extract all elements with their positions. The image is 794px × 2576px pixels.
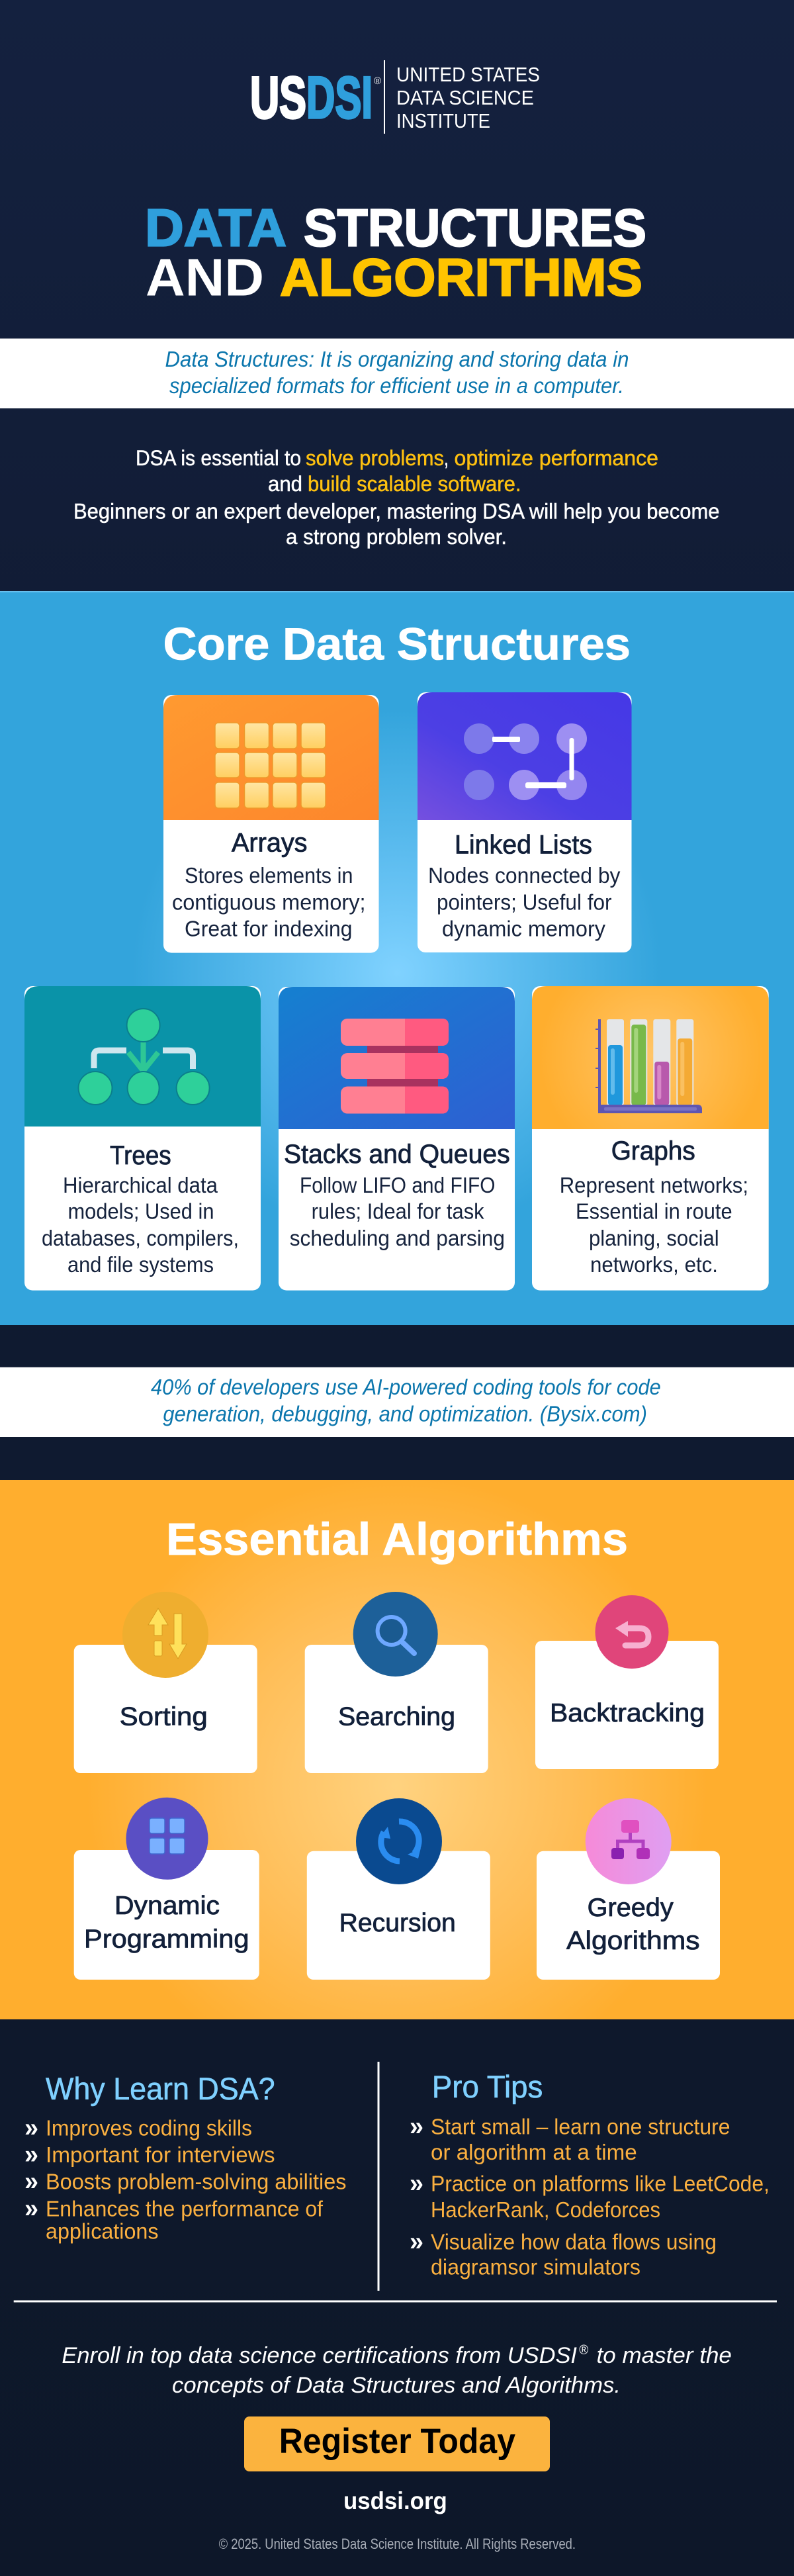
bullet list: why learn: Important for interviews	[46, 2142, 275, 2167]
trees description	[42, 1173, 239, 1277]
card: trees	[24, 986, 261, 1291]
intro text: a strong problem solver.	[286, 525, 507, 549]
stacks description	[290, 1173, 505, 1250]
bullet list: why learn: »	[24, 2140, 38, 2170]
title: DATA	[145, 199, 287, 257]
card: recursion	[307, 1798, 490, 1980]
bullet list: why learn: Enhances the performance of	[46, 2196, 324, 2221]
trees description: databases, compilers,	[42, 1226, 239, 1250]
bullet list: why learn: Boosts problem-solving abilities	[46, 2170, 347, 2193]
definition band	[0, 339, 794, 408]
graphs description: Essential in route	[576, 1199, 732, 1223]
label: greedy algorithms: Algorithms	[566, 1927, 700, 1955]
graphs title: Graphs	[611, 1136, 695, 1166]
arrays title: Arrays	[232, 829, 307, 858]
call to action text: to master the	[597, 2343, 732, 2368]
call to action text: Enroll in top data science certifications from USDSI	[62, 2343, 578, 2368]
linked lists description	[428, 863, 621, 941]
intro text: solve problems	[306, 446, 444, 470]
heading: essential algorithms: Essential Algorithms	[166, 1514, 628, 1565]
label: dynamic programming: Dynamic	[114, 1892, 220, 1920]
label: recursion: Recursion	[339, 1909, 456, 1937]
bullet list: why learn: »	[24, 2167, 38, 2196]
bullet list: pro tips: »	[410, 2227, 423, 2256]
bullet list: pro tips	[410, 2112, 770, 2279]
panel: why learn DSA	[24, 2071, 347, 2244]
intro text: optimize performance	[454, 446, 658, 470]
stacks title: Stacks and Queues	[284, 1140, 510, 1169]
panel: pro tips	[410, 2069, 770, 2279]
card: arrays	[163, 695, 378, 953]
trees title: Trees	[110, 1141, 171, 1170]
graphs description: Represent networks;	[560, 1173, 748, 1197]
icon: sort arrows	[122, 1592, 208, 1678]
heading: pro tips: Pro Tips	[432, 2069, 543, 2104]
call to action text: ®	[579, 2343, 588, 2358]
bullet list: pro tips: Visualize how data flows using	[431, 2229, 717, 2254]
graphs description	[560, 1173, 748, 1277]
card: sorting	[74, 1592, 257, 1773]
graphs description: planing, social	[589, 1226, 719, 1250]
bullet list: pro tips: or algorithm at a time	[431, 2140, 637, 2164]
card: greedy algorithms	[537, 1798, 720, 1980]
copyright: © 2025. United States Data Science Institute. All Rights Reserved.	[219, 2536, 576, 2552]
intro text: build scalable software.	[308, 472, 521, 496]
intro text: DSA is essential to	[136, 446, 301, 470]
bullet list: pro tips: Practice on platforms like LeetCode,	[431, 2171, 770, 2196]
heading: core data structures: Core Data Structures	[163, 618, 631, 670]
label: dynamic programming: Programming	[84, 1925, 249, 1954]
card: stacks and queues	[279, 987, 515, 1291]
graphs description: networks, etc.	[590, 1252, 718, 1277]
icon: bar chart	[596, 1019, 702, 1113]
statistic band	[0, 1367, 794, 1437]
stacks description: scheduling and parsing	[290, 1226, 505, 1250]
logo: ®	[374, 75, 381, 87]
bullet list: pro tips: Start small – learn one structure	[431, 2114, 730, 2139]
icon: stack layers	[341, 1019, 449, 1113]
logo: UNITED STATES	[396, 63, 540, 86]
bullet list: pro tips: »	[410, 2112, 423, 2141]
statistic band: generation, debugging, and optimization. (Bysix.com)	[163, 1401, 647, 1426]
bullet list: why learn: Improves coding skills	[46, 2115, 252, 2140]
bullet list: why learn: »	[24, 2113, 38, 2142]
website link: usdsi.org	[343, 2487, 447, 2514]
column divider	[377, 2062, 380, 2291]
icon: cycle arrows	[356, 1798, 442, 1884]
icon: grid	[215, 723, 326, 808]
stacks description: rules; Ideal for task	[312, 1199, 484, 1223]
definition band: specialized formats for efficient use in a computer.	[169, 373, 624, 398]
button: register today	[244, 2416, 550, 2471]
card: linked lists	[418, 692, 631, 952]
panel: essential algorithms	[0, 1480, 794, 2019]
logo: INSTITUTE	[396, 109, 490, 132]
card: dynamic programming	[74, 1798, 259, 1980]
icon: undo arrow	[596, 1595, 668, 1669]
icon: magnifier	[353, 1592, 438, 1677]
linked lists title: Linked Lists	[455, 830, 592, 859]
linked lists description: Nodes connected by	[428, 863, 621, 888]
intro text: ,	[444, 446, 449, 470]
statistic band: 40% of developers use AI-powered coding tools for code	[151, 1375, 661, 1399]
title: ALGORITHMS	[280, 248, 642, 307]
panel: core data structures	[0, 591, 794, 1325]
label: searching: Searching	[338, 1702, 455, 1731]
logo: US	[250, 64, 306, 130]
logo: DSI	[306, 64, 373, 130]
title: STRUCTURES	[304, 199, 646, 257]
trees description: Hierarchical data	[63, 1173, 218, 1197]
icon: linked nodes	[464, 723, 587, 800]
logo	[250, 60, 540, 134]
intro text: Beginners or an expert developer, mastering DSA will help you become	[73, 499, 720, 523]
label: sorting: Sorting	[120, 1702, 208, 1731]
bullet list: pro tips: HackerRank, Codeforces	[431, 2197, 660, 2222]
stacks description: Follow LIFO and FIFO	[300, 1173, 495, 1197]
label: backtracking: Backtracking	[550, 1699, 705, 1727]
definition band: Data Structures: It is organizing and storing data in	[165, 347, 629, 371]
heading: why learn DSA: Why Learn DSA?	[46, 2071, 275, 2106]
linked lists description: pointers; Useful for	[437, 890, 611, 915]
label: dynamic programming	[84, 1892, 249, 1954]
title	[145, 199, 646, 307]
arrays description: contiguous memory;	[172, 890, 365, 915]
linked lists description: dynamic memory	[442, 916, 605, 941]
intro text: and	[268, 472, 302, 496]
card: backtracking	[535, 1595, 719, 1769]
title: AND	[146, 248, 264, 307]
arrays description	[172, 863, 365, 941]
icon: decision tree	[586, 1798, 672, 1884]
bullet list: why learn: applications	[46, 2219, 159, 2244]
arrays description: Great for indexing	[185, 916, 352, 941]
bullet list: pro tips: diagramsor simulators	[431, 2254, 640, 2279]
label: greedy algorithms	[566, 1894, 700, 1955]
icon: tree	[78, 1009, 210, 1105]
bullet list: why learn	[24, 2113, 347, 2244]
bullet list: why learn: »	[24, 2194, 38, 2223]
button: register today: Register Today	[279, 2422, 515, 2461]
call to action text	[62, 2343, 732, 2398]
card: graphs	[532, 986, 769, 1291]
intro text	[73, 446, 720, 549]
label: greedy algorithms: Greedy	[588, 1894, 674, 1922]
bullet list: pro tips: »	[410, 2169, 423, 2198]
trees description: and file systems	[67, 1252, 214, 1277]
trees description: models; Used in	[67, 1199, 214, 1223]
arrays description: Stores elements in	[185, 863, 353, 888]
card: searching	[305, 1592, 488, 1773]
call to action text: concepts of Data Structures and Algorithms.	[172, 2373, 621, 2398]
icon: four squares	[126, 1798, 208, 1880]
logo: DATA SCIENCE	[396, 86, 534, 109]
